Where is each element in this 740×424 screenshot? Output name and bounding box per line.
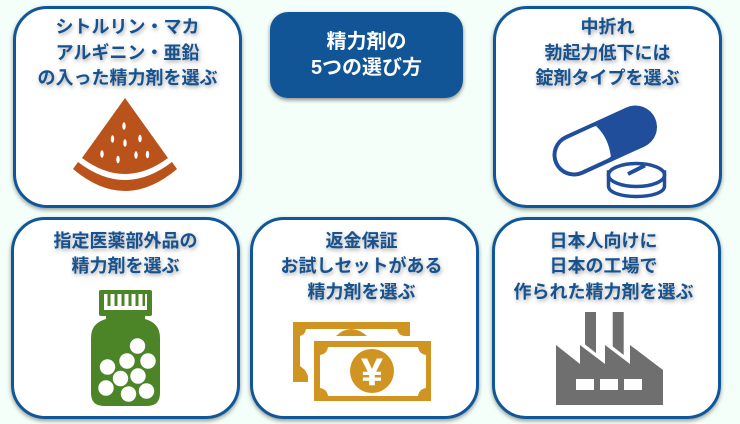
panel text: money-back guarantee bbox=[280, 230, 444, 304]
panel text: quasi-drug: 指定医薬部外品の bbox=[54, 230, 198, 250]
panel text: made in Japan: 日本の工場で bbox=[550, 256, 658, 276]
icon: yen banknotes bbox=[293, 322, 434, 406]
panel text: tablet type: 錠剤タイプを選ぶ bbox=[536, 68, 680, 88]
title: 5つの選び方 bbox=[311, 56, 422, 78]
icon: supplement bottle bbox=[91, 290, 160, 406]
icon: factory bbox=[556, 312, 663, 405]
panel text: tablet type bbox=[535, 17, 682, 90]
panel text: tablet type: 勃起力低下には bbox=[544, 42, 670, 62]
panel text: money-back guarantee: 精力剤を選ぶ bbox=[308, 282, 416, 302]
panel text: ingredients: シトルリン・マカ bbox=[56, 17, 200, 37]
icon: yen banknotes: ¥ bbox=[361, 352, 383, 394]
panel text: made in Japan: 日本人向けに bbox=[550, 230, 658, 250]
panel text: ingredients bbox=[37, 17, 220, 90]
panel text: quasi-drug bbox=[54, 230, 200, 278]
panel text: made in Japan bbox=[513, 230, 696, 304]
panel text: money-back guarantee: 返金保証 bbox=[326, 230, 398, 250]
icon: watermelon bbox=[73, 98, 177, 191]
panel text: ingredients: アルギニン・亜鉛 bbox=[56, 42, 199, 62]
panel text: ingredients: の入った精力剤を選ぶ bbox=[38, 68, 218, 88]
panel text: money-back guarantee: お試しセットがある bbox=[280, 256, 442, 276]
panel text: quasi-drug: 精力剤を選ぶ bbox=[72, 256, 180, 276]
panel: tablet type bbox=[493, 6, 722, 208]
panel: made in Japan bbox=[492, 217, 721, 419]
panel: quasi-drug bbox=[11, 217, 240, 419]
panel: citrulline, maca, arginine, zinc bbox=[13, 6, 242, 208]
icon: capsule and tablet bbox=[574, 122, 664, 196]
panel text: made in Japan: 作られた精力剤を選ぶ bbox=[514, 282, 694, 302]
title: 精力剤の bbox=[326, 31, 406, 53]
panel: money-back guarantee bbox=[250, 217, 479, 419]
title bbox=[270, 12, 463, 98]
panel text: tablet type: 中折れ bbox=[580, 17, 634, 37]
